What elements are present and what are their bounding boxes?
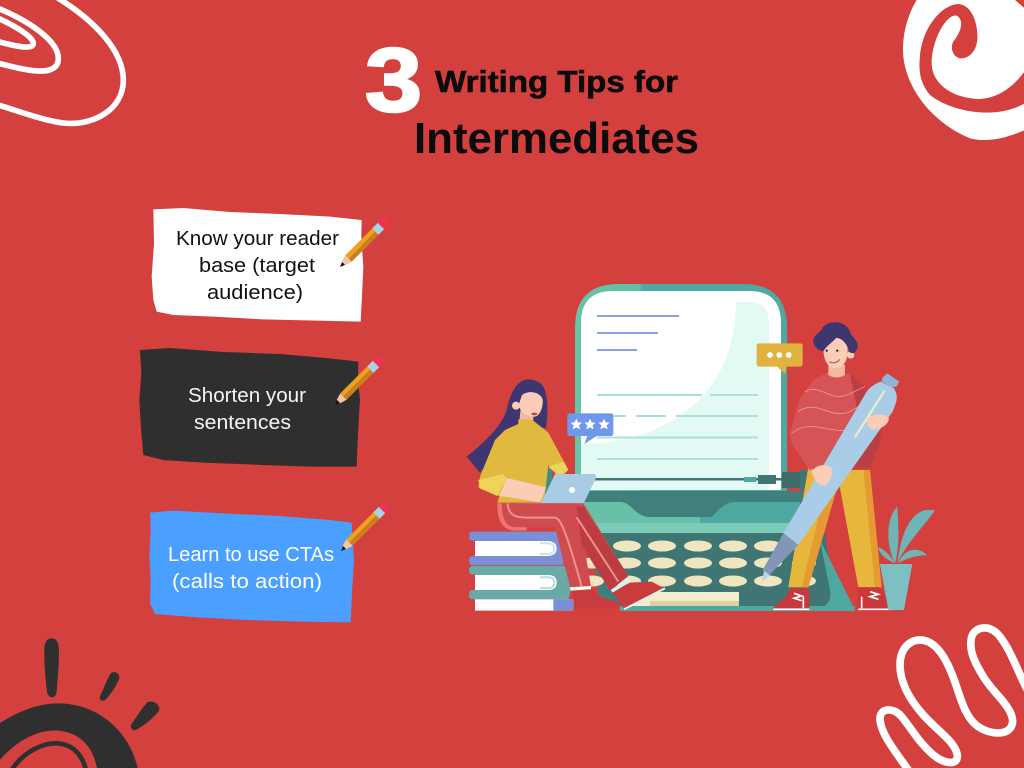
woman sleeve cuff: [478, 474, 507, 496]
dark gap behind laptop: [534, 465, 552, 500]
pen grip: [763, 533, 798, 575]
book 2: [469, 566, 570, 599]
pen body: [783, 382, 897, 545]
tip 3 text: Learn to use CTAs: [168, 544, 334, 566]
tip 1 text: Know your reader: [176, 228, 339, 250]
paper sheet: [581, 291, 781, 490]
woman shirt: [478, 419, 568, 503]
typewriter body: [580, 491, 830, 606]
typewriter space bar: [630, 592, 739, 606]
giant pen: [762, 373, 899, 581]
man left shoe: [773, 588, 809, 608]
card background dark: [139, 348, 360, 467]
woman left sock: [570, 586, 591, 591]
woman face: [519, 392, 543, 417]
laptop base: [517, 503, 583, 506]
tip 2 text: [188, 385, 306, 434]
woman far leg shade: [577, 507, 628, 591]
man right leg shade: [863, 470, 882, 587]
panel: tip 1 know your reader: [152, 208, 390, 322]
typewriter paper rail: [575, 470, 810, 490]
woman lips: [531, 413, 537, 415]
tip 1 text: [176, 228, 339, 304]
card background blue: [149, 511, 354, 622]
book 1 pages: [475, 541, 557, 556]
book 2 pages: [475, 575, 557, 590]
tip 1 text: base (target: [199, 255, 315, 277]
man right shoe sole and laces: [858, 592, 894, 609]
book 3 cover end: [553, 599, 573, 611]
typewriter key bed: [596, 533, 835, 606]
decoration: bottom-left sun: [0, 638, 159, 768]
panel: tip 3 learn CTAs: [149, 501, 391, 622]
typewriter paper frame: [575, 284, 787, 495]
woman neck: [519, 408, 533, 422]
pen cap knob: [882, 373, 899, 387]
title: [365, 31, 699, 163]
illustration: seated woman: [467, 379, 665, 609]
title numeral 3: 3: [365, 31, 422, 131]
typewriter band: [596, 523, 801, 533]
card background white: [152, 208, 363, 322]
typewriter base: [620, 606, 855, 611]
pen nib: [762, 571, 770, 581]
woman trousers: [502, 503, 628, 591]
man hair: [813, 322, 858, 353]
decoration: top-left swirl: [0, 0, 123, 123]
book 1 page shade: [540, 543, 554, 554]
icon: pencil: [337, 217, 390, 270]
woman left shoe: [572, 588, 619, 608]
shoe sole: [624, 588, 665, 609]
book 1: [469, 532, 563, 565]
pen clip: [855, 392, 884, 437]
man right shoe: [858, 587, 894, 608]
man left leg shade: [802, 477, 838, 587]
typewriter right stand: [815, 540, 855, 610]
woman thigh outline: [497, 503, 527, 531]
icon: star rating bubble: [567, 413, 613, 444]
paper tinted area: [581, 302, 769, 490]
illustration: standing man: [762, 322, 899, 609]
paper mint lines: [597, 395, 758, 459]
sweater pattern: [792, 387, 868, 433]
tip 3 text: (calls to action): [172, 571, 322, 593]
tip 3 text: [168, 544, 334, 593]
icon: typing bubble: [757, 343, 803, 374]
trouser stripe: [508, 503, 618, 587]
woman right shoe: [612, 582, 664, 609]
man sweater: [790, 373, 882, 471]
decoration: bottom-right squiggle: [880, 628, 1024, 768]
plant pot: [880, 564, 912, 610]
woman hair: [467, 379, 547, 473]
tip 2 text: sentences: [194, 412, 291, 434]
typewriter keys: [580, 540, 816, 586]
tip 2 text: Shorten your: [188, 385, 306, 407]
sweater shade: [837, 374, 882, 467]
man left trouser leg: [788, 467, 838, 587]
illustration: stack of books: [469, 532, 573, 611]
man right trouser leg: [837, 470, 882, 587]
plant leaves: [878, 507, 935, 563]
man ear: [847, 351, 854, 359]
man lower hand: [812, 465, 833, 486]
typewriter right hump: [700, 502, 800, 532]
man face: [823, 338, 848, 368]
laptop logo: [569, 487, 575, 493]
man eyes and smile: [825, 349, 840, 363]
book 2 page shade: [540, 577, 554, 588]
woman laptop lid: [541, 474, 596, 504]
icon: pencil: [332, 355, 385, 408]
woman right sock: [611, 578, 631, 593]
woman ear: [512, 402, 520, 410]
decoration: top-right spiral blob: [903, 0, 1024, 140]
man neck: [828, 365, 845, 377]
illustration: potted plant: [878, 507, 935, 610]
typewriter left hump: [580, 502, 700, 532]
space bar shadow: [650, 601, 739, 606]
woman right cuff: [548, 462, 568, 477]
title line 2: Intermediates: [414, 114, 699, 163]
icon: pencil: [338, 501, 391, 554]
tip 1 text: audience): [207, 282, 303, 304]
man left shoe sole and laces: [773, 593, 809, 609]
illustration: typewriter: [534, 284, 855, 611]
man upper hand: [867, 415, 889, 429]
woman forearm: [499, 478, 546, 503]
book 3: [475, 599, 573, 611]
panel: tip 2 shorten sentences: [139, 348, 385, 467]
title line 1: Writing Tips for: [435, 64, 678, 99]
paper blue lines: [597, 316, 679, 350]
